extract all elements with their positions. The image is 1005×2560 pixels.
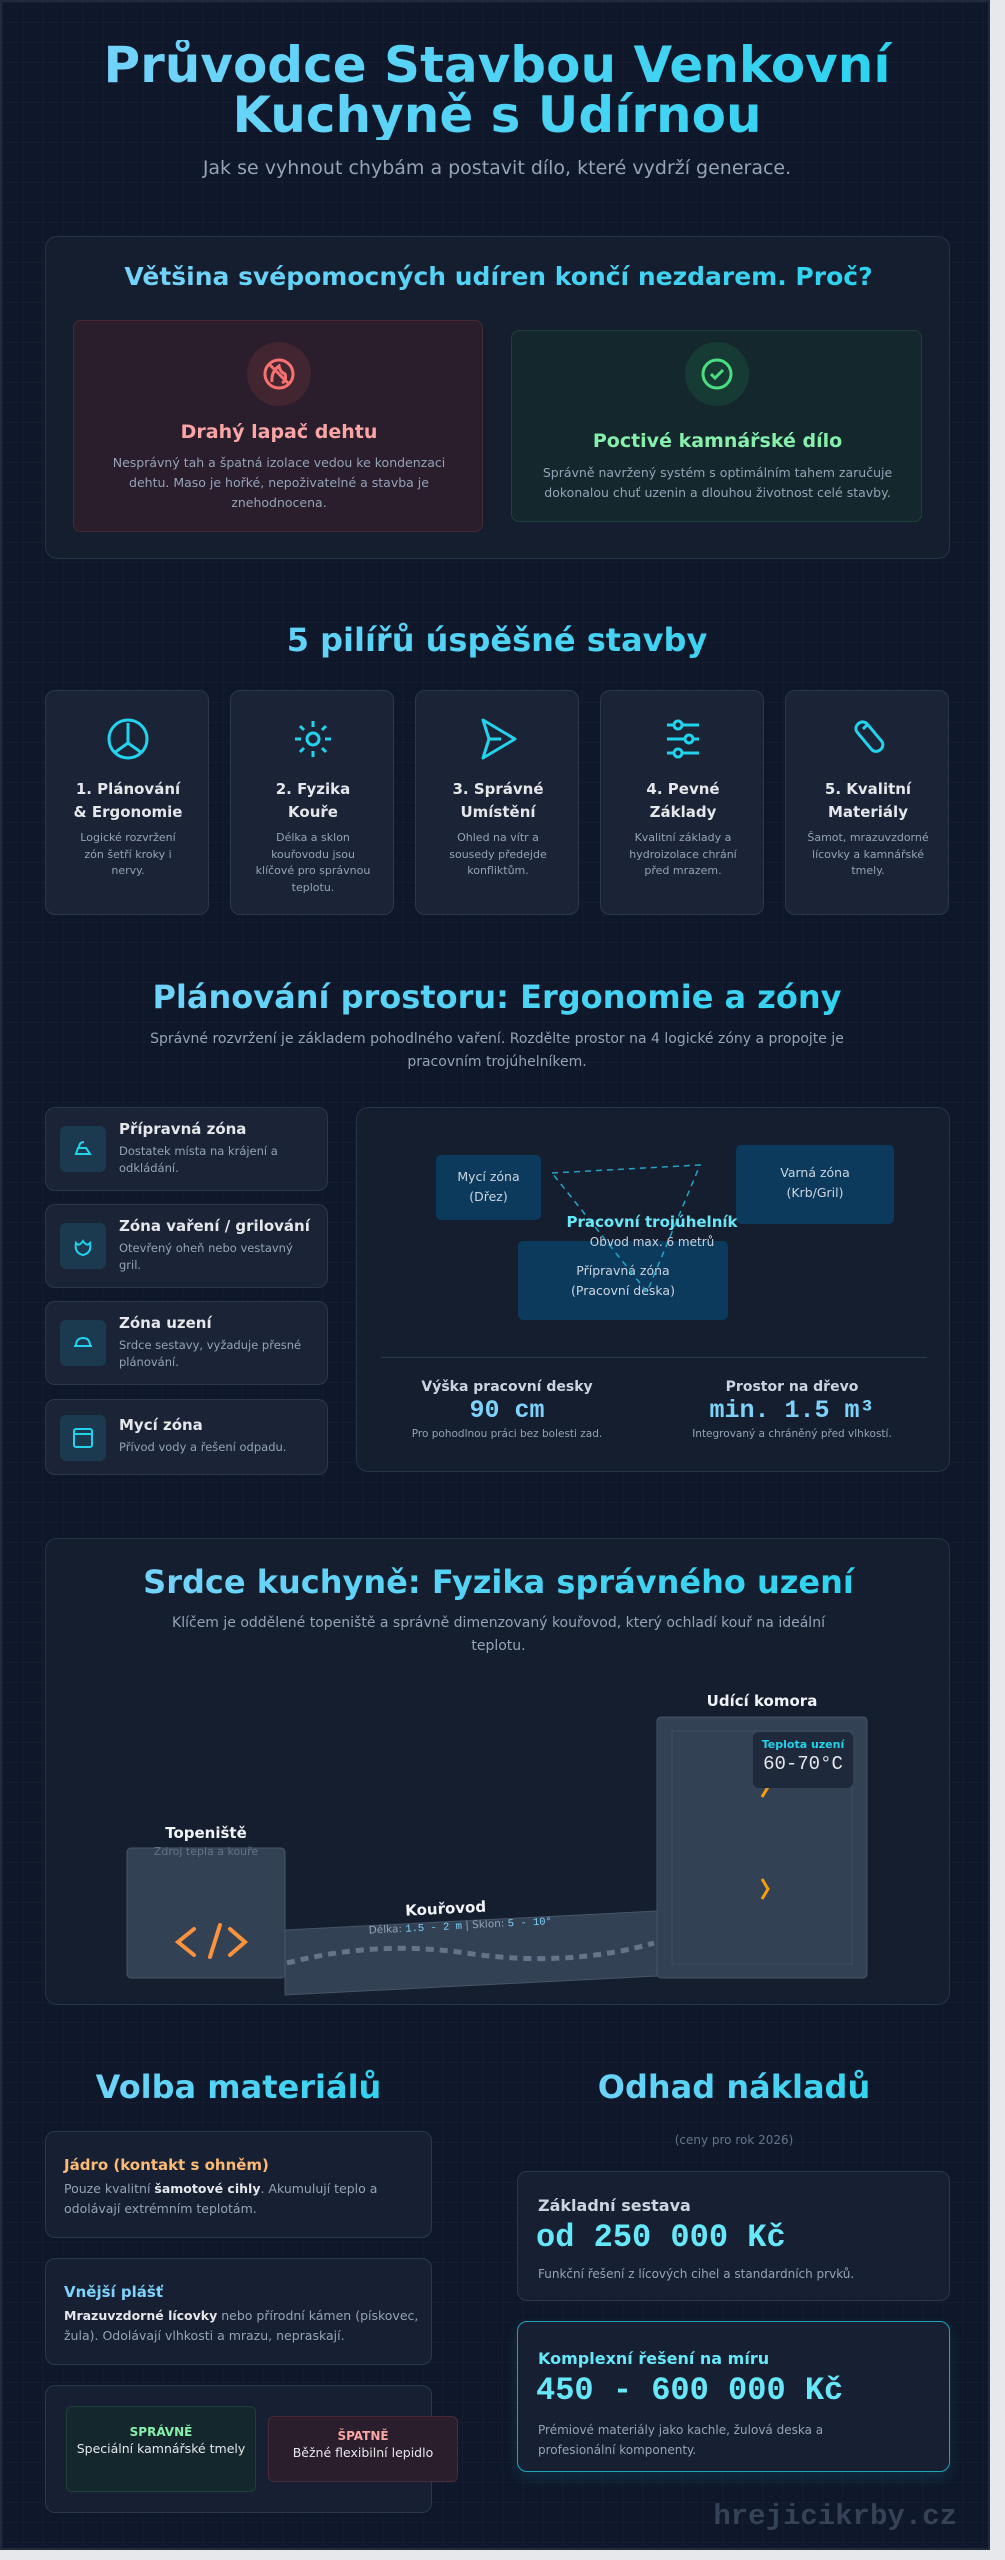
- right: Speciální kamnářské tmely: [77, 2441, 245, 2456]
- zone: prep: [45, 1107, 328, 1191]
- good text: Správně navržený systém s optimálním tahem zaručuje dokonalou chuť uzenin a dlouhou životnost celé stavby.: [543, 465, 892, 500]
- triangle lines: [552, 1164, 702, 1292]
- pillar 2: 2. Fyzika: [276, 780, 350, 798]
- flue: [285, 1911, 657, 1995]
- heading: planning: Plánování prostoru: Ergonomie a zóny: [152, 978, 842, 1016]
- title: Průvodce Stavbou Venkovní: [103, 36, 891, 94]
- title: [2, 40, 992, 140]
- stat: wood: [692, 1379, 892, 1440]
- pillar 3: Ohled na vítr a sousedy předejde konfliktům.: [449, 831, 547, 877]
- bad title: Drahý lapač dehtu: [181, 421, 377, 443]
- zone: smoking: [45, 1301, 328, 1385]
- physics subtitle: Klíčem je oddělené topeniště a správně dimenzovaný kouřovod, který ochladí kouř na ideální teplotu.: [172, 1615, 825, 1654]
- cost: premium: Prémiové materiály jako kachle, žulová deska a profesionální komponenty.: [538, 2423, 823, 2457]
- pillar 1: [45, 690, 209, 915]
- callout: temperature: 60-70°C: [763, 1753, 843, 1775]
- zone: washing: [45, 1399, 328, 1475]
- material: shell: Mrazuvzdorné lícovky nebo přírodní kámen (pískovec, žula). Odolávají vlhkosti a mrazu, nepraskají.: [64, 2308, 418, 2343]
- pillar 4: Kvalitní základy a hydroizolace chrání před mrazem.: [629, 831, 737, 877]
- label: flue: Délka: 1.5 - 2 m | Sklon: 5 - 10°: [368, 1916, 552, 1937]
- stat: wood: Prostor na dřevo: [726, 1379, 858, 1395]
- zone: cooking: Zóna vaření / grilování: [119, 1217, 310, 1235]
- label: chamber: Udící komora: [707, 1692, 817, 1710]
- zone: prep: Dostatek místa na krájení a odkládání.: [119, 1144, 278, 1175]
- label: flue: Kouřovod: [405, 1898, 487, 1920]
- zone box: sink: (Dřez): [469, 1189, 508, 1204]
- zone box: sink: Mycí zóna: [457, 1169, 520, 1184]
- right: SPRÁVNĚ: [130, 2425, 192, 2439]
- stat: height: 90 cm: [469, 1396, 544, 1425]
- chamber: [657, 1717, 867, 1978]
- heading: costs: Odhad nákladů: [598, 2068, 870, 2106]
- subtitle: Jak se vyhnout chybám a postavit dílo, které vydrží generace.: [203, 157, 791, 179]
- zone box: prep: [518, 1241, 728, 1320]
- pillars row: [45, 690, 949, 915]
- smoker diagram: [126, 1716, 868, 1996]
- wrong: ŠPATNĚ: [337, 2429, 389, 2443]
- stat: height: [412, 1379, 602, 1440]
- triangle label: Pracovní trojúhelník: [566, 1213, 738, 1231]
- cost: premium: 450 - 600 000 Kč: [536, 2372, 843, 2409]
- triangle sub: Obvod max. 6 metrů: [590, 1235, 714, 1249]
- wrong: Běžné flexibilní lepidlo: [293, 2445, 433, 2460]
- heading: materials: Volba materiálů: [96, 2068, 381, 2106]
- icon: check: [685, 342, 749, 406]
- material: shell: Vnější plášť: [64, 2283, 163, 2301]
- label: flue: [368, 1898, 552, 1937]
- zone: cooking: [45, 1204, 328, 1288]
- pillar 4: Základy: [650, 803, 716, 821]
- pillar 2: Délka a sklon kouřovodu jsou klíčové pro správnou teplotu.: [256, 831, 370, 894]
- heading: pillars: 5 pilířů úspěšné stavby: [287, 621, 707, 659]
- zone box: prep: (Pracovní deska): [571, 1283, 675, 1298]
- heading: pillars: [2, 621, 992, 659]
- pillar 5: Materiály: [828, 803, 908, 821]
- heading: costs: [518, 2068, 950, 2106]
- pillar 1: Logické rozvržení zón šetří kroky i nervy.: [80, 831, 176, 877]
- material: core: [45, 2131, 432, 2238]
- zone box: prep: Přípravná zóna: [576, 1263, 670, 1278]
- zone box: cooking: Varná zóna: [780, 1165, 850, 1180]
- cost: premium: Komplexní řešení na míru: [538, 2349, 769, 2368]
- firebox sub: Zdroj tepla a kouře: [154, 1845, 258, 1858]
- cost: premium: [517, 2321, 950, 2472]
- callout: temperature: Teplota uzení: [762, 1738, 844, 1751]
- panel: smoking physics: [45, 1538, 950, 2005]
- pillar 2: Kouře: [288, 803, 338, 821]
- stat: height: Pro pohodlnou práci bez bolesti zad.: [412, 1428, 602, 1440]
- zone list: [45, 1107, 328, 1475]
- pillar 4: [600, 690, 764, 915]
- stat: height: Výška pracovní desky: [421, 1379, 593, 1395]
- material: sealants: [45, 2385, 432, 2513]
- zone box: cooking: (Krb/Gril): [786, 1185, 844, 1200]
- planning subtitle: Správné rozvržení je základem pohodlného vaření. Rozdělte prostor na 4 logické zóny a propojte je pracovním trojúhelníkem.: [150, 1031, 844, 1070]
- pillar 1: 1. Plánování: [76, 780, 180, 798]
- firebox: [127, 1848, 285, 1978]
- zone: smoking: Srdce sestavy, vyžaduje přesné plánování.: [119, 1338, 301, 1369]
- pillar 3: 3. Správné: [452, 780, 544, 798]
- stat: wood: min. 1.5 m³: [709, 1396, 875, 1425]
- cost: basic: Základní sestava: [538, 2196, 691, 2215]
- heading: planning: [2, 978, 992, 1016]
- footer brand: hrejicikrby.cz: [713, 2500, 957, 2533]
- zone: cooking: Otevřený oheň nebo vestavný gril.: [119, 1241, 293, 1272]
- pillar 2: [230, 690, 394, 915]
- heading: problem: Většina svépomocných udíren končí nezdarem. Proč?: [124, 262, 873, 291]
- pillar 4: 4. Pevné: [646, 780, 720, 798]
- panel: problem: [45, 236, 950, 559]
- material: core: Jádro (kontakt s ohněm): [64, 2156, 269, 2174]
- callout: temperature: [753, 1732, 853, 1788]
- zone: smoking: Zóna uzení: [119, 1314, 212, 1332]
- material: shell: [45, 2258, 432, 2365]
- label: firebox: Topeniště: [165, 1824, 247, 1842]
- zone: washing: Mycí zóna: [119, 1416, 203, 1434]
- pillar 5: 5. Kvalitní: [825, 780, 911, 798]
- zone: washing: Přívod vody a řešení odpadu.: [119, 1440, 286, 1454]
- zone box: sink: [436, 1155, 541, 1220]
- card: good: [511, 330, 922, 522]
- bad text: Nesprávný tah a špatná izolace vedou ke kondenzaci dehtu. Maso je hořké, nepoživatelné a stavba je znehodnocena.: [113, 455, 445, 510]
- title: Kuchyně s Udírnou: [232, 86, 762, 144]
- material: core: Pouze kvalitní šamotové cihly. Akumulují teplo a odolávají extrémním teplotám.: [64, 2181, 377, 2216]
- stat: wood: Integrovaný a chráněný před vlhkostí.: [692, 1428, 892, 1440]
- zone box: cooking: [736, 1145, 894, 1224]
- cost note: (ceny pro rok 2026): [675, 2133, 793, 2147]
- pillar 5: Šamot, mrazuvzdorné lícovky a kamnářské tmely.: [807, 831, 929, 877]
- pillar 3: [415, 690, 579, 915]
- good title: Poctivé kamnářské dílo: [593, 430, 842, 452]
- zone: prep: Přípravná zóna: [119, 1120, 246, 1138]
- pillar 3: Umístění: [460, 803, 536, 821]
- wrong: [268, 2416, 458, 2482]
- panel: work triangle: [356, 1107, 950, 1472]
- pillar 1: & Ergonomie: [74, 803, 182, 821]
- cost: basic: Funkční řešení z lícových cihel a standardních prvků.: [538, 2267, 854, 2281]
- cost: basic: od 250 000 Kč: [536, 2219, 786, 2256]
- pillar 5: [785, 690, 949, 915]
- icon: no fire: [247, 342, 311, 406]
- cost: basic: [517, 2171, 950, 2301]
- right: [66, 2406, 256, 2492]
- heading: physics: Srdce kuchyně: Fyzika správného uzení: [143, 1563, 854, 1601]
- card: bad: [73, 320, 483, 532]
